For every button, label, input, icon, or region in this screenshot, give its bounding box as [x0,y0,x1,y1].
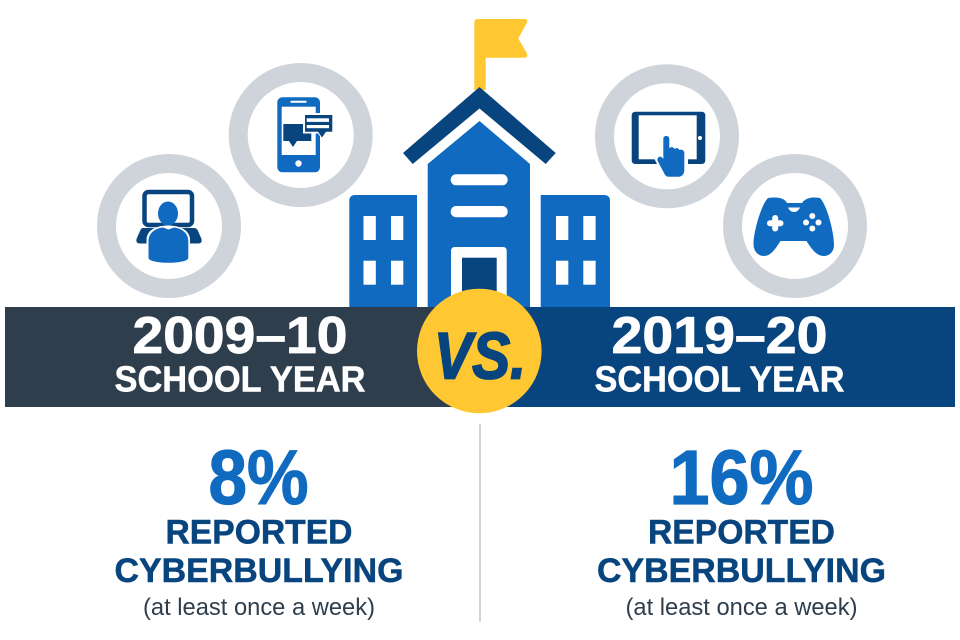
roof [403,87,556,164]
icon: yellow flag [474,19,527,90]
stat: 2019–20 cyberbullying: REPORTED [648,514,835,552]
icon: person at desktop computer [106,164,232,288]
badge: VS. [417,289,542,413]
icon: game controller [732,164,858,288]
stat: 2019–20 cyberbullying: (at least once a week) [626,594,858,621]
stat: 2009–10 cyberbullying: 8% [208,435,308,521]
right wing [541,195,610,307]
banner: 2019–20 school year: 2019–20 [612,307,828,365]
icon: tablet with pointing hand [604,74,730,199]
stat: 2009–10 cyberbullying: (at least once a week) [143,594,375,621]
main hall [428,121,530,307]
banner: 2019–20 school year [480,307,955,407]
stat: 2019–20 cyberbullying: CYBERBULLYING [597,552,886,590]
banner: 2019–20 school year: SCHOOL YEAR [594,358,844,400]
banner: 2009–10 school year: SCHOOL YEAR [114,358,366,400]
stat: 2009–10 cyberbullying: REPORTED [166,514,352,552]
badge: VS.: VS. [434,318,526,392]
banner: 2009–10 school year [5,307,480,407]
vertical divider [479,424,481,622]
icon: smartphone with chat bubbles [238,72,363,198]
icon: school building [349,87,610,307]
stat: 2019–20 cyberbullying: 16% [670,435,814,521]
stat: 2009–10 cyberbullying [114,435,404,621]
left wing [349,195,417,307]
stat: 2019–20 cyberbullying [597,435,886,621]
stat: 2009–10 cyberbullying: CYBERBULLYING [114,552,404,590]
banner: 2009–10 school year: 2009–10 [132,307,348,365]
